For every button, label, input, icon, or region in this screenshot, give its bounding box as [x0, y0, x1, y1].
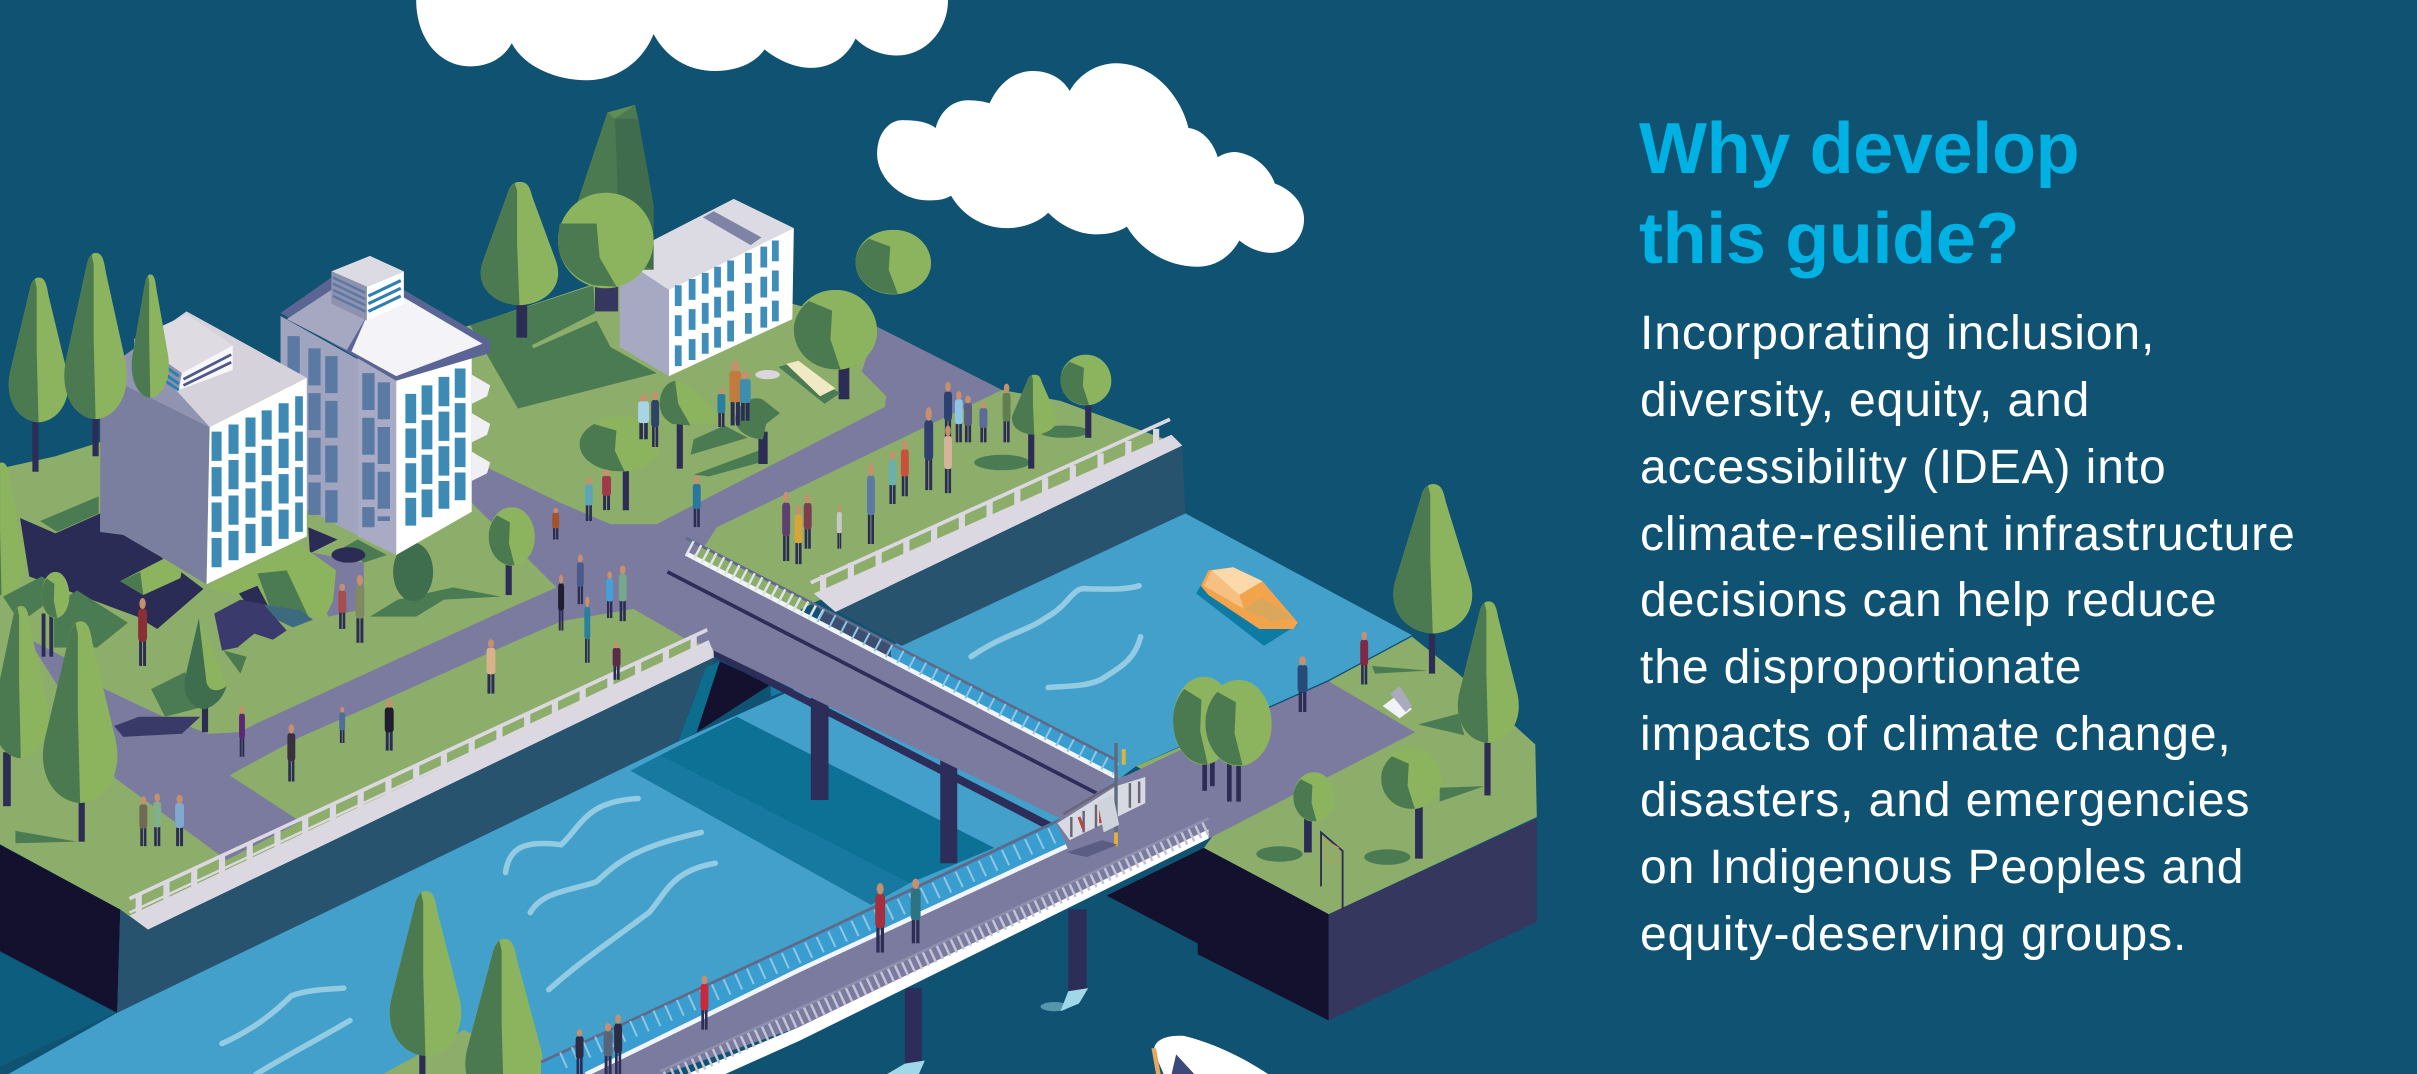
bridge shadow bands on water [630, 684, 994, 905]
left embankment railing [129, 629, 715, 930]
dark rocks [214, 600, 313, 674]
people: central path [138, 554, 627, 782]
island bench [1383, 686, 1412, 718]
tree: upper lawn cone [481, 182, 558, 338]
people: upper lawn group [552, 361, 751, 540]
basketball hoop [1321, 832, 1343, 909]
lawn shadows near building 1 [3, 496, 387, 717]
body text: disasters, and emergencies [1640, 774, 2250, 827]
cylinder bush [120, 556, 181, 595]
left block: river wall [117, 657, 715, 1013]
pillar splashes [886, 988, 1088, 1074]
lower bridge blue railing [541, 822, 1067, 1074]
upper footbridge [667, 538, 1116, 834]
lower-left lawn scrap [382, 1030, 547, 1074]
building 1: left block [100, 311, 307, 584]
river water [8, 513, 1412, 1074]
plaza shadow [114, 717, 200, 737]
trees: lawn [580, 355, 1111, 510]
body text: decisions can help reduce [1640, 574, 2218, 627]
right island: navy wall [1329, 819, 1537, 1020]
round dark bush and shadow [370, 543, 501, 617]
title: this guide? [1639, 199, 2019, 279]
water ripples [222, 586, 1141, 1074]
main land: paved paths [28, 327, 1002, 860]
trees: foreground river bank [390, 891, 543, 1074]
tree: round by path [794, 290, 877, 399]
main land: lawn [0, 284, 1182, 930]
people: on lower bridge [576, 878, 921, 1074]
white boat [1151, 1036, 1269, 1074]
people: right promenade group [782, 382, 1011, 564]
body text: diversity, equity, and [1640, 374, 2090, 427]
left teal riverbank [0, 953, 116, 1067]
right island: small lawn [1136, 741, 1218, 783]
body text: on Indigenous Peoples and [1640, 841, 2244, 894]
tower balconies [472, 375, 490, 481]
bicycle rack at bridge junction [1057, 743, 1145, 857]
block windows [217, 403, 284, 567]
block penthouse [134, 314, 233, 373]
title [1639, 109, 2079, 279]
right island: paved path [1127, 681, 1415, 839]
upper embankment railing [811, 419, 1182, 612]
lower bridge grey railing [660, 819, 1208, 1074]
trees: lower lawn [0, 462, 535, 842]
body text [1640, 307, 2296, 961]
main land: dark shadow band [20, 513, 203, 629]
orange boat [1196, 567, 1298, 646]
body text: Incorporating inclusion, [1640, 307, 2155, 360]
people: right island [1298, 632, 1368, 712]
upper block: river wall [825, 446, 1185, 646]
tree: floating round [856, 230, 931, 294]
tree: tall dark behind [577, 105, 654, 270]
dark gap and blob between buildings [308, 527, 365, 563]
tree shadows on lawns [15, 425, 1484, 865]
tower penthouse [331, 256, 404, 287]
title: Why develop [1639, 109, 2079, 189]
left block: dark side wall [0, 845, 120, 1013]
bridge pillars [811, 694, 1087, 1064]
body text: equity-deserving groups. [1640, 908, 2187, 961]
building 2: tower [281, 256, 490, 555]
cloud: top [416, 0, 948, 80]
right island: dark wall [1107, 848, 1329, 1020]
building 3 windows [678, 241, 775, 366]
body text: impacts of climate change, [1640, 708, 2232, 761]
building 3: right block [620, 199, 794, 376]
tower windows [411, 368, 460, 526]
people: lower-left group [139, 793, 184, 846]
trees: right island [1173, 484, 1519, 859]
tree: upper round bush [558, 193, 654, 311]
right island: lawn [1204, 637, 1537, 914]
large lawn bush [207, 543, 336, 620]
main land: upper lawn shadow [470, 285, 657, 409]
body text: the disproportionate [1640, 641, 2082, 694]
bench and manhole [755, 361, 840, 404]
cloud: right [877, 63, 1304, 267]
body text: accessibility (IDEA) into [1640, 441, 2167, 494]
left block: wall wedge under bridge [678, 661, 720, 741]
footbridge railing [686, 538, 1116, 777]
lower footbridge [541, 775, 1208, 1074]
trees: far left row [9, 253, 169, 472]
small path between buildings [301, 547, 364, 617]
body text: climate-resilient infrastructure [1640, 508, 2296, 560]
